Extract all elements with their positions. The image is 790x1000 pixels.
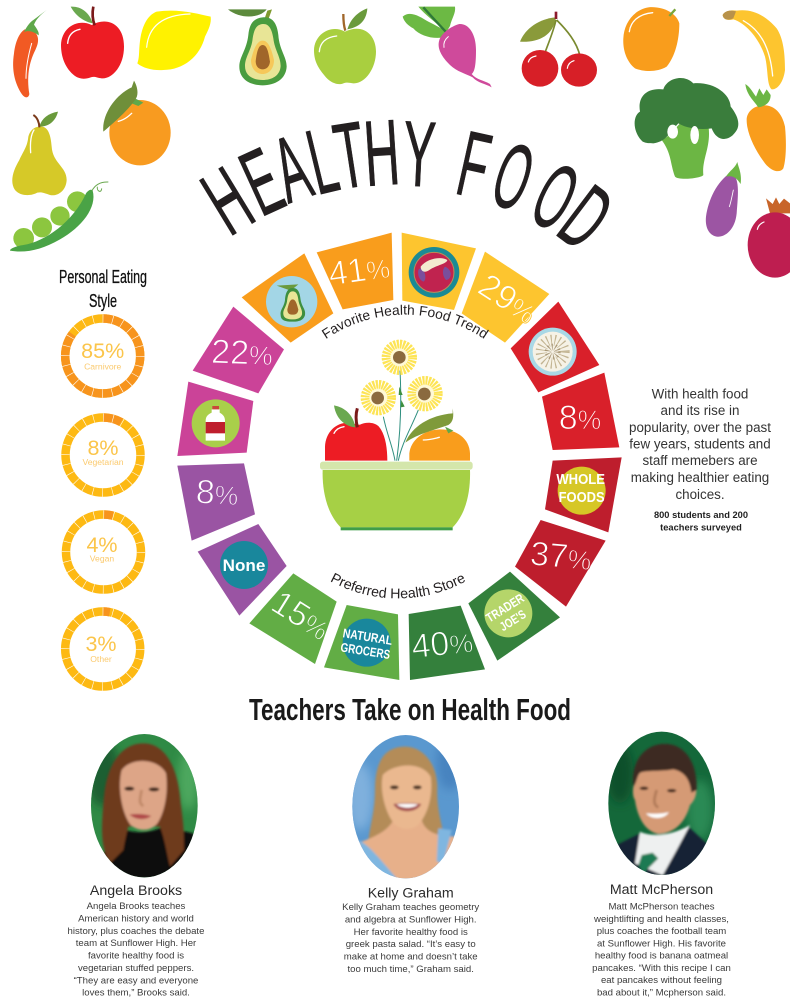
name: Angela Brooks: Angela Brooks: [90, 883, 182, 899]
teacher: Matt McPherson: [592, 730, 731, 998]
icon: pomegranate: [748, 197, 790, 278]
bio: Matt McPherson: at Sunflower High. His favorite: [597, 938, 726, 949]
segment: 8 percent teacher: [177, 463, 255, 541]
bio: Angela Brooks: favorite healthy food is: [88, 950, 184, 962]
fruits and vegetables, top right: [403, 7, 790, 278]
segment: Natural Grocers: [324, 605, 399, 680]
donut: vegetarian 8 percent: 8%: [87, 436, 119, 460]
icon: chili pepper: [13, 10, 47, 97]
bio: Angela Brooks: “They are easy and everyone: [74, 975, 198, 986]
title: Healthy Food, arched: H: [186, 148, 270, 255]
bio: Kelly Graham: and algebra at Sunflower High.: [345, 914, 477, 926]
heading: teachers take on health food: Teachers Take on Health Food: [249, 692, 571, 727]
name: Matt McPherson: Matt McPherson: [610, 882, 713, 898]
icon: broccoli: [635, 78, 738, 179]
icon: bowl apple: [325, 405, 387, 461]
title: Healthy Food, arched: [186, 100, 631, 270]
bio: Angela Brooks: team at Sunflower High. Her: [76, 938, 197, 949]
teacher: Angela Brooks: [68, 733, 204, 999]
segment: 37 percent: 37%: [529, 535, 593, 578]
title: Healthy Food, arched: A: [261, 115, 323, 223]
bio: Kelly Graham: make at home and doesn’t take: [344, 952, 478, 962]
segment: 40 percent: 40%: [410, 622, 475, 666]
icon: beet: [403, 7, 492, 87]
heading: personal eating style: [59, 267, 147, 311]
text block: intro paragraph: making healthier eating: [631, 470, 769, 485]
segment: 22 percent: [193, 307, 284, 393]
segment: 8 percent teacher: 8%: [195, 473, 240, 513]
bio: Angela Brooks: American history and world: [78, 914, 194, 924]
donut: carnivore 85 percent: [65, 318, 140, 394]
segment: 29 percent: 29%: [472, 266, 544, 332]
bio: Matt McPherson: healthy food is banana oatmeal: [595, 950, 728, 962]
segment: 40 percent: [409, 606, 485, 680]
segment: Natural Grocers: GROCERS: [340, 640, 391, 662]
bio: Angela Brooks: history, plus coaches the debate: [68, 926, 204, 937]
icon: pear: [12, 112, 67, 195]
icon: green apple: [314, 8, 376, 84]
title: Healthy Food, arched: L: [298, 108, 347, 215]
bio: Matt McPherson: plus coaches the football team: [597, 926, 726, 937]
segment: Trader Joe's: JOE'S: [497, 607, 529, 634]
icon: sunflower left: [365, 384, 392, 411]
donut: vegan 4 percent: Vegan: [90, 554, 114, 564]
donut: vegan 4 percent: 4%: [86, 533, 118, 557]
text block: intro paragraph: and its rise in: [661, 403, 739, 418]
icon: lemon: [137, 11, 211, 70]
donut: other 3 percent: 3%: [85, 632, 117, 656]
photo: Angela Brooks: [87, 733, 200, 878]
text block: intro paragraph: staff memebers are: [642, 453, 758, 468]
bio: Matt McPherson: weightlifting and health classes,: [593, 914, 729, 925]
donut: carnivore 85 percent: Carnivore: [84, 362, 122, 372]
segment: 8 percent student: 8%: [559, 399, 601, 437]
donut: other 3 percent: Other: [90, 654, 112, 664]
text block: intro paragraph: [629, 386, 771, 532]
bio: Matt McPherson: Matt McPherson teaches: [608, 902, 715, 912]
title: Healthy Food, arched: E: [226, 128, 298, 236]
bio: Angela Brooks: loves them,” Brooks said.: [82, 988, 190, 999]
label: Preferred Health Store: Preferred Health Store: [330, 572, 465, 598]
segment: oatmeal icon: [511, 302, 599, 392]
circular chart ring: [177, 233, 622, 680]
segment: avocado icon: [242, 253, 333, 343]
donut: vegan 4 percent: [66, 514, 141, 590]
teacher: Kelly Graham: [342, 733, 479, 975]
photo: Kelly Graham: [352, 735, 459, 878]
panel: personal eating style: [59, 267, 147, 686]
icon: sunflower right: [412, 380, 438, 407]
icon: bowl orange: [405, 408, 470, 461]
title: Healthy Food, arched: O: [517, 143, 594, 251]
text block: intro paragraph: few years, students and: [629, 436, 771, 452]
segment: None: None: [223, 556, 265, 575]
bio: Angela Brooks: Angela Brooks teaches: [87, 901, 186, 912]
label: Favorite Health Food Trend: Favorite Health Food Trend: [322, 304, 489, 339]
segment: Natural Grocers: NATURAL: [342, 626, 394, 648]
icon: bowl body: [320, 462, 473, 530]
segment: 41 percent: 41%: [326, 247, 392, 294]
photo: Matt McPherson: [607, 730, 717, 878]
segment: Whole Foods: WHOLE: [556, 472, 605, 488]
title: Healthy Food, arched: F: [449, 111, 499, 219]
heading: personal eating style: Style: [89, 291, 117, 311]
icon: banana: [723, 10, 785, 89]
segment: 8 percent student: [542, 373, 619, 450]
icon: cherries: [520, 12, 597, 87]
segment: supplement bottle icon: [177, 382, 253, 456]
segment: Whole Foods: FOODS: [559, 490, 605, 506]
title: Healthy Food, arched: D: [541, 166, 631, 270]
icon: red apple: [61, 7, 124, 79]
icon: avocado: [228, 9, 287, 85]
bio: Kelly Graham: Her favorite healthy food is: [354, 927, 468, 938]
segment: Whole Foods: [545, 457, 622, 532]
title: Healthy Food, arched: Y: [400, 102, 438, 207]
bio: Kelly Graham: Kelly Graham teaches geometry: [342, 902, 479, 913]
donut: carnivore 85 percent: 85%: [81, 339, 124, 363]
title: Healthy Food, arched: H: [361, 100, 403, 206]
donut: vegetarian 8 percent: Vegetarian: [82, 457, 124, 467]
segment: acai bowl icon: [402, 233, 476, 310]
segment: Trader Joe's: TRADER: [484, 591, 527, 625]
segment: None: [198, 524, 287, 616]
center illustration: fruit bowl with sunflowers: [320, 344, 473, 530]
text block: intro paragraph: With health food: [652, 386, 748, 402]
donut: other 3 percent: [65, 612, 140, 686]
title: Healthy Food, arched: T: [327, 102, 373, 209]
icon: orange bell pepper: [623, 7, 679, 71]
fruits and vegetables, top left: [10, 7, 376, 252]
bio: Angela Brooks: vegetarian stuffed peppers.: [78, 963, 194, 974]
segment: 37 percent: [515, 520, 606, 607]
bio: Kelly Graham: greek pasta salad. “It’s easy to: [346, 939, 476, 950]
bio: Kelly Graham: too much time,” Graham said.: [348, 964, 474, 975]
name: Kelly Graham: Kelly Graham: [368, 886, 454, 902]
icon: sunflower top: [386, 344, 413, 371]
icon: sunflower stems: [383, 370, 418, 461]
bio: Angela Brooks: [68, 901, 204, 999]
bio: Kelly Graham: [342, 902, 479, 975]
segment: 41 percent: [317, 233, 393, 309]
text block: intro paragraph: popularity, over the past: [629, 420, 771, 435]
heading: personal eating style: Personal Eating: [59, 267, 147, 287]
icon: eggplant: [706, 162, 741, 237]
bio: Matt McPherson: bad about it,” Mcpherson said.: [597, 987, 726, 998]
segment: Trader Joe's: [468, 572, 560, 661]
donut: vegetarian 8 percent: [66, 418, 140, 492]
title: Healthy Food, arched: O: [481, 122, 546, 232]
segment: 15 percent: 15%: [265, 583, 337, 648]
text block: intro paragraph: 800 students and 200: [654, 510, 748, 520]
bio: Matt McPherson: eat pancakes without feeling: [601, 975, 722, 986]
segment: 15 percent: [249, 573, 337, 664]
icon: carrot: [745, 84, 786, 171]
segment: 22 percent: 22%: [211, 333, 273, 373]
text block: intro paragraph: teachers surveyed: [660, 522, 742, 532]
text block: intro paragraph: choices.: [675, 487, 725, 502]
icon: pea pod: [10, 182, 108, 252]
bio: Matt McPherson: pancakes. “With this recipe I can: [592, 963, 731, 974]
segment: 29 percent: [462, 252, 549, 343]
bio: Matt McPherson: [592, 902, 731, 998]
icon: orange with leaf: [103, 81, 171, 165]
